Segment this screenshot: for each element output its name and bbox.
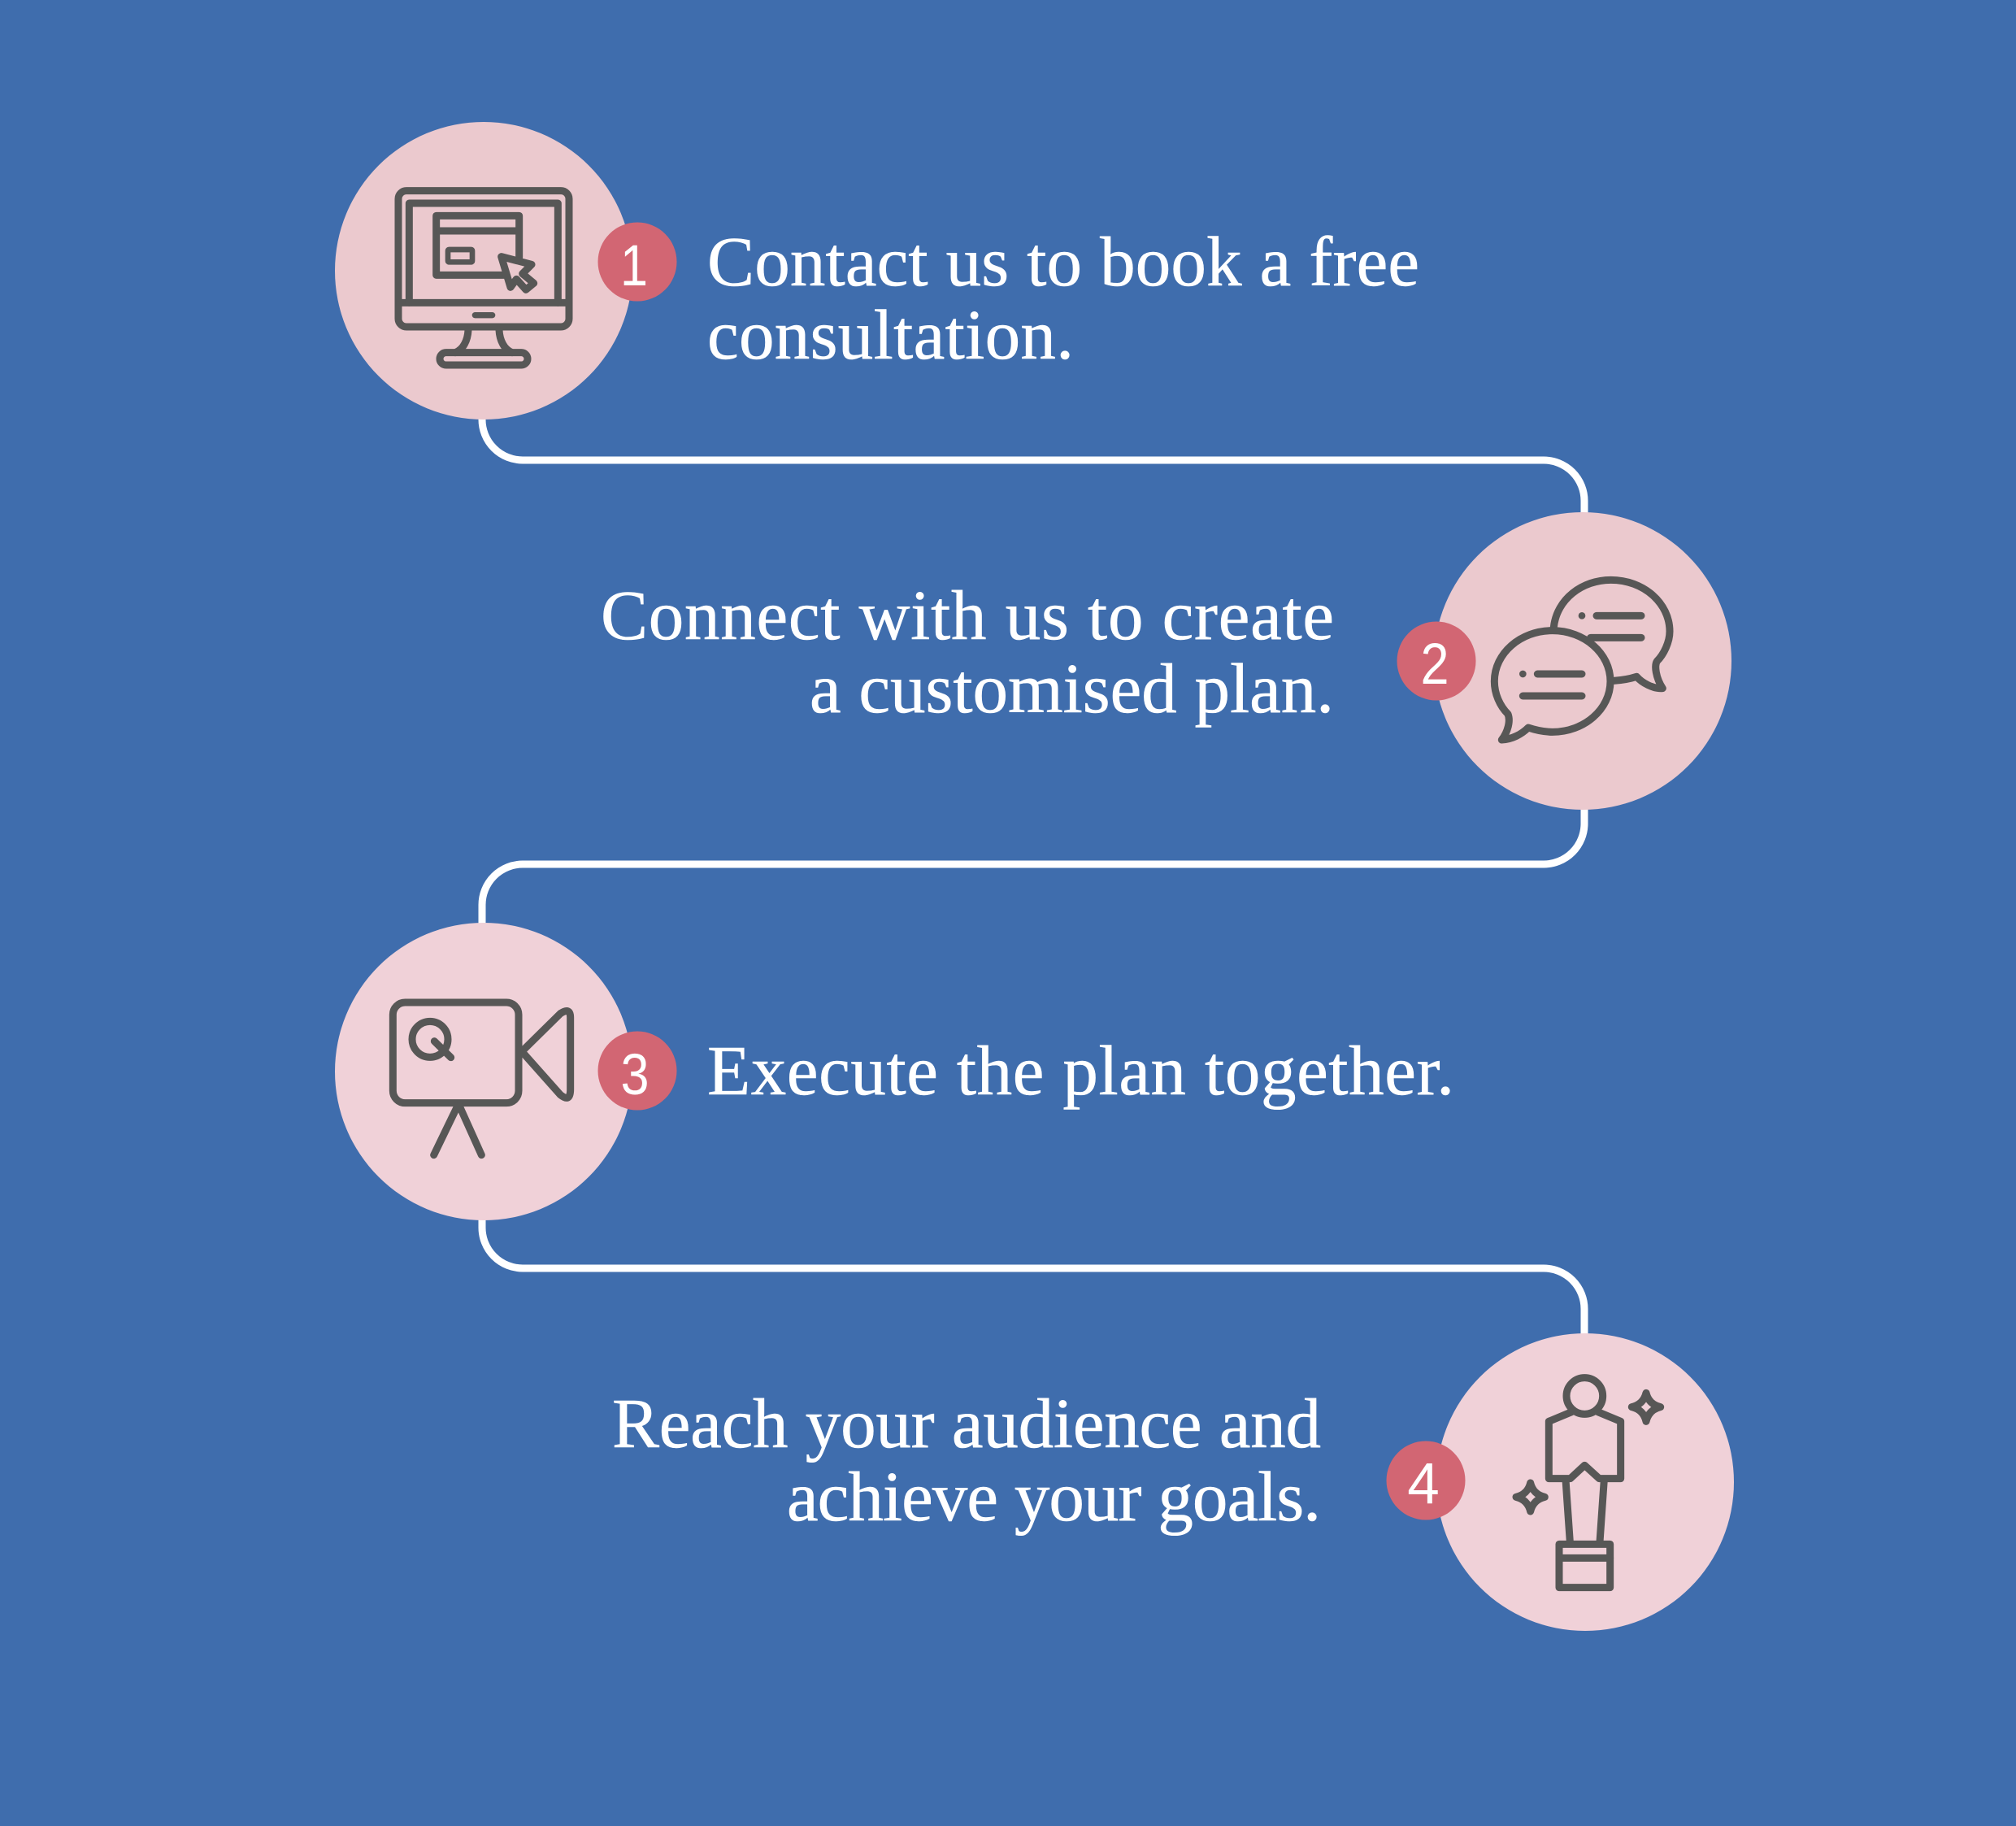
connector: step 2 to step 3 bbox=[482, 805, 1584, 927]
icon: trophy statue with sparkles bbox=[1516, 1378, 1661, 1588]
panel: step 3 bbox=[335, 923, 1454, 1220]
badge: number 3 bbox=[598, 1031, 676, 1111]
text: step 2: Connect with us to create bbox=[601, 576, 1334, 654]
badge: number 3: 3 bbox=[621, 1043, 649, 1107]
badge: number 4 bbox=[1387, 1441, 1465, 1520]
connector: step 1 to step 2 bbox=[482, 415, 1584, 516]
circle: step 2 bbox=[1434, 512, 1731, 810]
badge: number 2: 2 bbox=[1421, 633, 1449, 697]
badge: number 1 bbox=[598, 223, 676, 301]
text: step 4: Reach your audience and bbox=[612, 1384, 1321, 1463]
circle: step 4 bbox=[1436, 1333, 1734, 1631]
text: step 1: Contact us to book a free bbox=[707, 222, 1419, 301]
text: step 1 bbox=[707, 222, 1419, 374]
text: step 3: Execute the plan together. bbox=[707, 1031, 1454, 1110]
icon: video camera on tripod bbox=[393, 1002, 571, 1155]
text: step 1: consultation. bbox=[707, 295, 1074, 374]
badge: number 4: 4 bbox=[1407, 1452, 1440, 1516]
panel: step 2 bbox=[601, 512, 1731, 810]
icon: computer monitor with cursor bbox=[396, 191, 571, 365]
circle: step 1 bbox=[335, 122, 632, 420]
circle: step 3 bbox=[335, 923, 632, 1220]
panel: step 4 bbox=[612, 1333, 1734, 1631]
panel: step 1 bbox=[335, 122, 1419, 420]
text: step 2: a customised plan. bbox=[810, 649, 1334, 728]
badge: number 2 bbox=[1397, 621, 1476, 701]
text: step 2 bbox=[601, 576, 1334, 728]
text: step 4 bbox=[612, 1384, 1321, 1536]
icon: speech bubbles bbox=[1494, 580, 1670, 740]
connector: step 3 to step 4 bbox=[482, 1215, 1584, 1338]
badge: number 1: 1 bbox=[620, 234, 648, 298]
text: step 4: achieve your goals. bbox=[787, 1457, 1321, 1536]
